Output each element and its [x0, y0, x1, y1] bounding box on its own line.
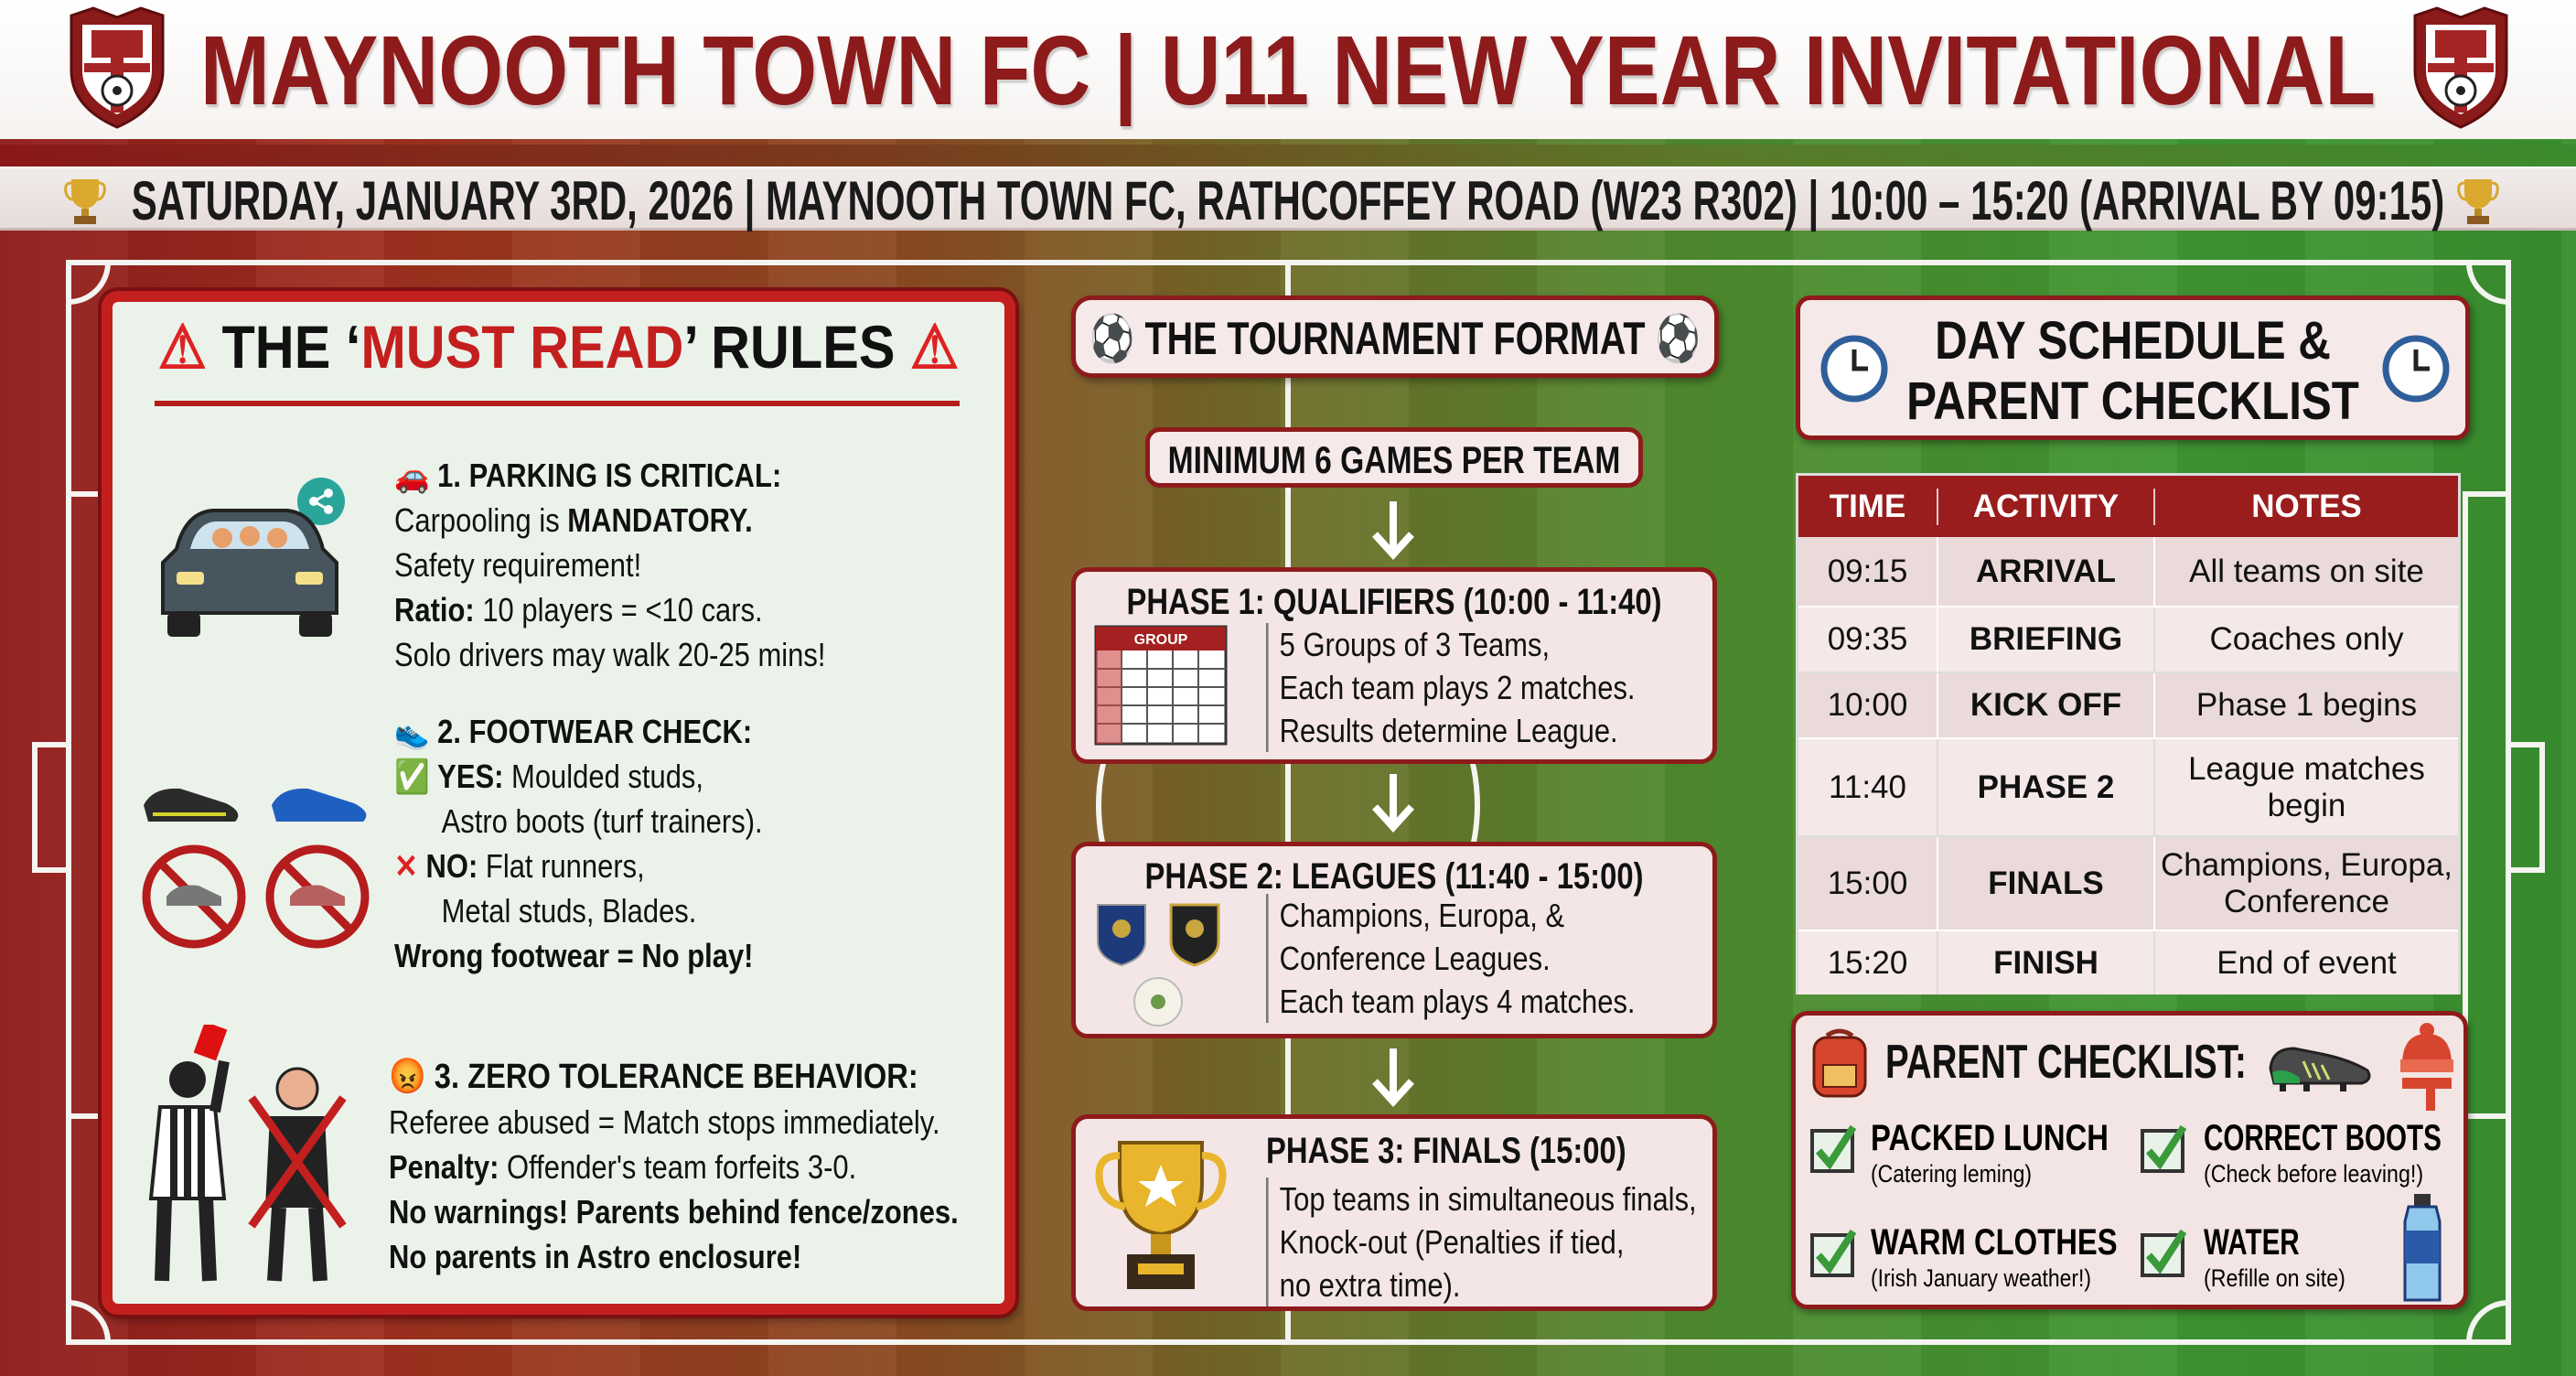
schedule table: 09:35: [1828, 621, 1907, 657]
panel: phase 3: no extra time).: [1280, 1266, 1461, 1304]
heading: day schedule: DAY SCHEDULE &: [1935, 311, 2331, 371]
arrow 1: [1372, 501, 1414, 560]
panel: phase 1: 5 Groups of 3 Teams,: [1280, 626, 1550, 663]
icon: clock right: [2382, 335, 2450, 403]
text: footwear: [394, 713, 763, 974]
schedule table: BRIEFING: [1970, 621, 2122, 657]
icon: league badges: [1097, 904, 1220, 1027]
icon: boots no-signs: [143, 789, 370, 948]
heading: tournament format: ⚽ THE TOURNAMENT FORMAT ⚽: [1089, 313, 1701, 364]
checklist items: WATER: [2204, 1222, 2300, 1263]
schedule table: 10:00: [1828, 687, 1907, 723]
panel: must read rules: [102, 291, 1015, 1315]
icon: right crest: [2413, 6, 2508, 129]
schedule table: PHASE 2: [1978, 769, 2114, 805]
icon: group table: GROUP: [1134, 632, 1188, 648]
panel: phase 2: [1071, 842, 1717, 1038]
panel: phase 1: [1071, 567, 1717, 764]
text: parking: Ratio: 10 players = <10 cars.: [394, 591, 763, 629]
callout: minimum games: [1145, 427, 1643, 488]
checklist items: (Catering leming): [1871, 1160, 2032, 1188]
callout: minimum games: MINIMUM 6 GAMES PER TEAM: [1168, 438, 1620, 481]
text: behaviour: No warnings! Parents behind fence/zones.: [389, 1193, 959, 1231]
schedule table: [1796, 473, 2461, 994]
checklist items: (Irish January weather!): [1871, 1264, 2091, 1292]
icon: referee: [148, 1025, 347, 1281]
panel: phase 1: Each team plays 2 matches.: [1280, 669, 1636, 706]
panel: phase 1: Results determine League.: [1280, 712, 1618, 749]
text: behaviour: Penalty: Offender's team forfeits 3-0.: [389, 1148, 856, 1186]
schedule table: Phase 1 begins: [2196, 687, 2417, 723]
text: parking: Carpooling is MANDATORY.: [394, 501, 753, 539]
text: parking: Solo drivers may walk 20-25 mins!: [394, 636, 825, 673]
panel: parent checklist: [1791, 1011, 2468, 1309]
schedule table: FINALS: [1988, 865, 2104, 900]
schedule table: ACTIVITY: [1973, 489, 2119, 523]
icon: water bottle: [2404, 1194, 2441, 1301]
heading: must read rules: ⚠ THE ‘MUST READ’ RULES ⚠: [158, 313, 959, 381]
icon: car: [161, 478, 345, 637]
arrow 2: [1372, 774, 1414, 833]
schedule table: ARRIVAL: [1976, 553, 2116, 589]
text: parking: [394, 457, 825, 673]
title: MAYNOOTH TOWN FC | U11 NEW YEAR INVITATIONAL: [200, 15, 2376, 125]
checklist items: WARM CLOTHES: [1871, 1222, 2118, 1263]
icon: hat and scarf: [2400, 1023, 2453, 1111]
checklist items: CORRECT BOOTS: [2204, 1118, 2442, 1158]
text: behaviour: No parents in Astro enclosure!: [389, 1238, 801, 1275]
schedule table: 09:15: [1828, 553, 1907, 589]
panel: phase 3: Top teams in simultaneous finals,: [1280, 1180, 1697, 1218]
date text: SATURDAY, JANUARY 3RD, 2026 | MAYNOOTH TOWN FC, RATHCOFFEY ROAD (W23 R302) | 10:00 – 15:20 (ARRIVAL BY 09:15): [132, 170, 2444, 231]
header band: [0, 0, 2576, 139]
text: parking: 🚗 1. PARKING IS CRITICAL:: [394, 457, 781, 494]
schedule table: End of event: [2216, 944, 2397, 981]
schedule table: All teams on site: [2189, 553, 2424, 589]
icon: boot: [2269, 1047, 2371, 1091]
schedule table: League matches: [2188, 750, 2425, 787]
checklist items: (Refille on site): [2204, 1264, 2345, 1292]
panel: phase 2: Champions, Europa, &: [1280, 897, 1564, 934]
schedule table: 15:20: [1828, 944, 1907, 981]
text: footwear: ✕ NO: Flat runners,: [394, 847, 645, 885]
panel: parent checklist: PARENT CHECKLIST:: [1885, 1036, 2247, 1089]
text: footwear: Metal studs, Blades.: [442, 892, 696, 930]
icon: left crest: [70, 6, 165, 129]
heading: tournament format: [1071, 296, 1719, 378]
schedule table: Champions, Europa,: [2161, 847, 2453, 882]
text: behaviour: 😡 3. ZERO TOLERANCE BEHAVIOR:: [389, 1058, 918, 1096]
schedule table: begin: [2268, 787, 2345, 823]
icon: trophy: [1096, 1141, 1226, 1289]
arrow 3: [1372, 1048, 1414, 1107]
schedule table: NOTES: [2251, 489, 2362, 523]
panel: phase 3: PHASE 3: FINALS (15:00): [1266, 1131, 1626, 1171]
checklist items: [1810, 1118, 2442, 1292]
panel: phase 3: [1071, 1114, 1717, 1311]
icon: backpack: [1813, 1028, 1866, 1098]
panel: phase 2: Conference Leagues.: [1280, 940, 1551, 977]
icon: clock left: [1820, 335, 1888, 403]
schedule table: Conference: [2224, 884, 2389, 919]
checklist items: PACKED LUNCH: [1871, 1118, 2109, 1158]
text: behaviour: [389, 1058, 959, 1275]
panel: phase 2: PHASE 2: LEAGUES (11:40 - 15:00): [1144, 856, 1644, 897]
icon: trophy left: [64, 179, 106, 224]
schedule table: FINISH: [1993, 944, 2098, 981]
heading: day schedule: [1796, 296, 2470, 440]
heading: day schedule: PARENT CHECKLIST: [1906, 371, 2359, 431]
text: footwear: ✅ YES: Moulded studs,: [394, 758, 703, 795]
schedule table: 15:00: [1828, 865, 1907, 900]
schedule table: KICK OFF: [1970, 687, 2121, 723]
panel: phase 1: PHASE 1: QUALIFIERS (10:00 - 11:40): [1126, 582, 1662, 622]
panel: phase 3: Knock-out (Penalties if tied,: [1280, 1223, 1625, 1261]
date band: [0, 145, 2576, 167]
text: footwear: Wrong footwear = No play!: [394, 937, 753, 974]
text: footwear: 👟 2. FOOTWEAR CHECK:: [394, 713, 752, 750]
icon: trophy right: [2457, 179, 2499, 224]
checklist items: (Check before leaving!): [2204, 1160, 2423, 1188]
schedule table: 11:40: [1829, 769, 1906, 805]
icon: group table: [1094, 626, 1228, 745]
text: behaviour: Referee abused = Match stops immediately.: [389, 1103, 940, 1141]
schedule table: TIME: [1830, 489, 1905, 523]
text: footwear: Astro boots (turf trainers).: [442, 802, 763, 840]
schedule table: Coaches only: [2209, 621, 2404, 657]
text: parking: Safety requirement!: [394, 546, 641, 584]
panel: phase 2: Each team plays 4 matches.: [1280, 983, 1636, 1020]
